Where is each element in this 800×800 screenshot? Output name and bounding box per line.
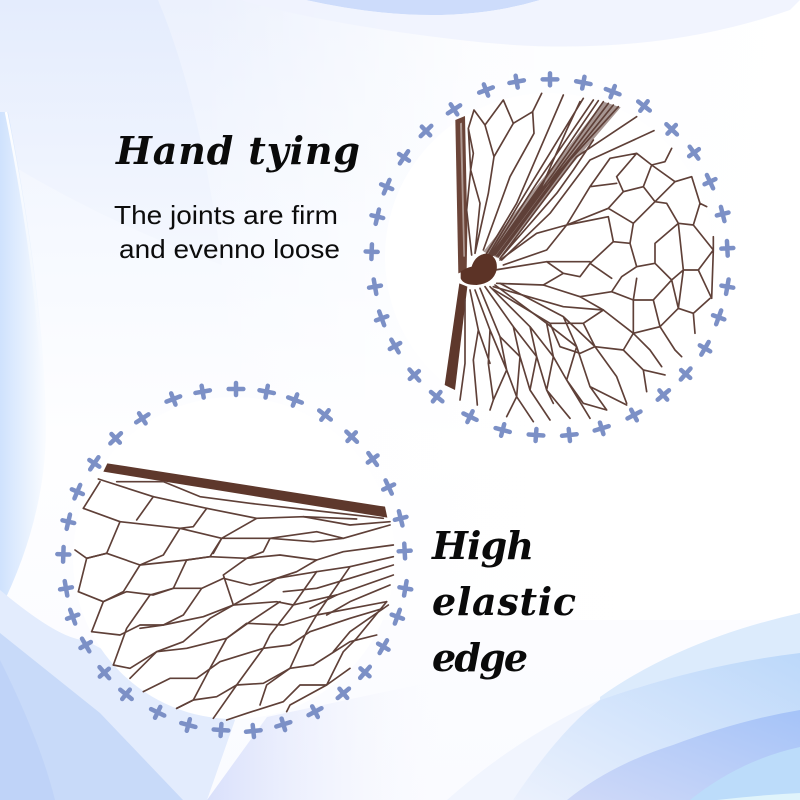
text block: joints description [114,200,340,264]
net: hand tied knot mesh [445,93,713,422]
heading: High elastic edge: edge [432,635,528,680]
knot [461,253,497,285]
ring of blue crosses [57,383,413,738]
net: elastic edge mesh [75,463,393,720]
heading: High elastic edge: elastic [432,579,576,624]
panel: elastic edge net circle [57,383,413,738]
white disc [73,397,395,719]
text block: joints description: The joints are firm [114,200,338,230]
heading: Hand tying: Hand tying [115,128,360,173]
panel: hand tying net circle [365,73,735,442]
text block: joints description: and evenno loose [119,234,340,264]
white disc [385,93,713,421]
heading: High elastic edge [431,523,576,680]
ring of blue crosses [365,73,735,442]
heading: High elastic edge: High [431,523,534,568]
